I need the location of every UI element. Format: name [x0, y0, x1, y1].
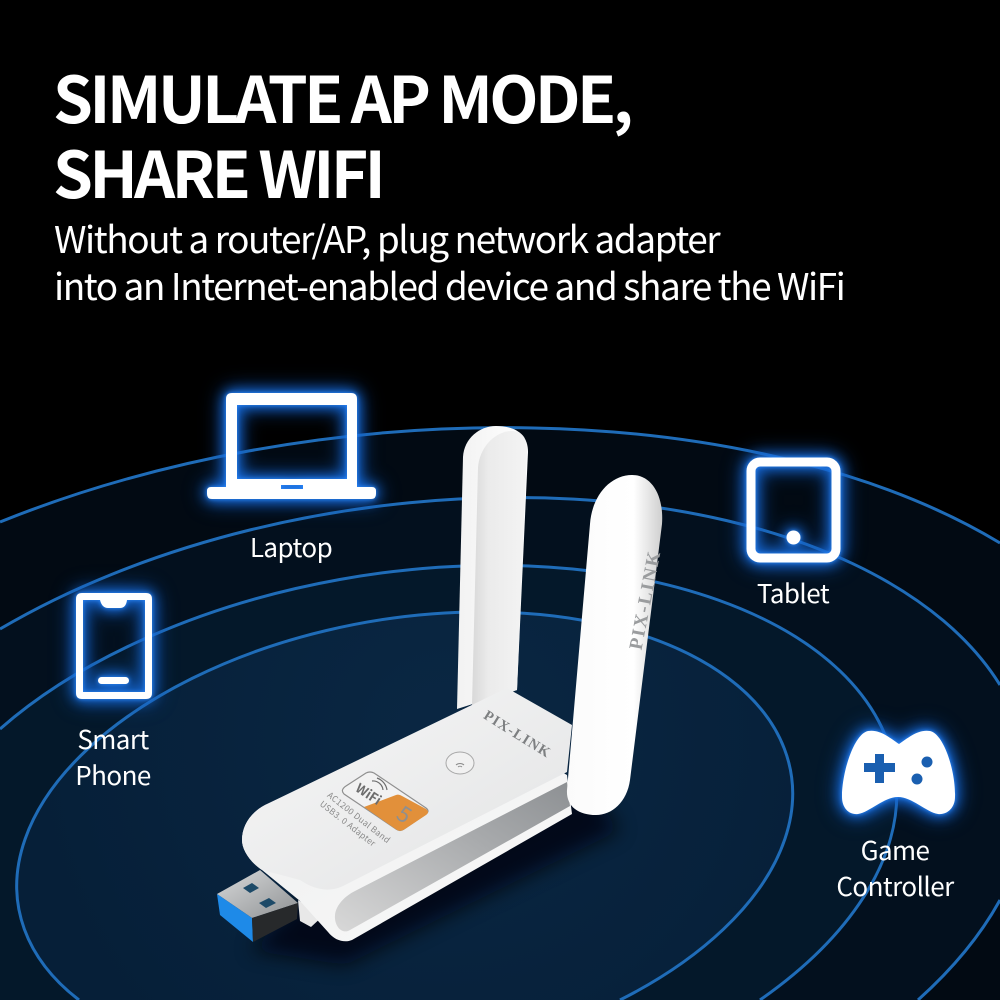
label: Game Controller: Game	[861, 831, 930, 868]
subtitle: into an Internet-enabled device and share the WiFi	[54, 257, 844, 311]
USB plug	[217, 870, 324, 942]
model text: AC1200 Dual Band	[325, 789, 393, 846]
title: SHARE WIFI	[53, 125, 382, 217]
badge: WiFi 5: WiFi	[352, 778, 386, 809]
icon: smart phone	[76, 593, 152, 699]
badge: WiFi 5	[342, 772, 428, 831]
device shadow	[250, 790, 620, 965]
badge: WiFi 5: 5	[391, 797, 419, 830]
title: SIMULATE AP MODE,	[53, 50, 631, 142]
icon: laptop	[207, 393, 376, 499]
left antenna	[457, 426, 528, 709]
product: USB WiFi adapter	[217, 426, 666, 942]
wifi button	[446, 752, 474, 774]
label: Game Controller: Controller	[836, 867, 955, 904]
body underside and lip	[242, 715, 572, 941]
icon: tablet	[751, 462, 836, 558]
recess	[335, 782, 570, 931]
background: concentric signal rings	[0, 428, 1000, 1000]
model text line two: USB3. 0 Adapter	[317, 798, 379, 850]
logo on top: PIX-LINK	[480, 708, 554, 762]
icon: game controller	[842, 731, 955, 814]
label: Smart Phone: Smart	[77, 720, 149, 757]
label: Smart Phone: Phone	[75, 756, 151, 793]
subtitle: Without a router/AP, plug network adapter	[54, 210, 721, 264]
label: Tablet: Tablet	[757, 574, 830, 611]
antenna logo: PIX-LINK	[626, 548, 666, 652]
top face	[242, 688, 572, 890]
right antenna	[567, 475, 662, 815]
label: Laptop: Laptop	[250, 528, 332, 565]
